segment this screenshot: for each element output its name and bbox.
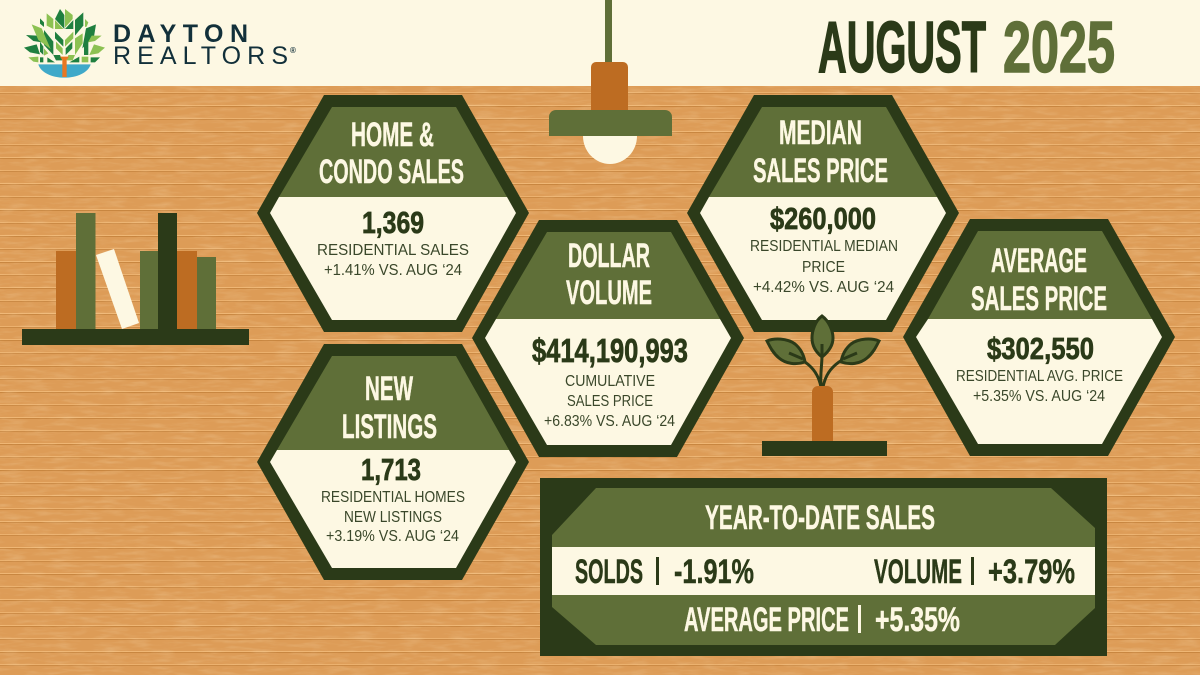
- heading: YEAR-TO-DATE SALES: [705, 499, 935, 537]
- stat: average price: AVERAGE PRICE: [684, 601, 849, 639]
- icon: tree: [24, 9, 105, 78]
- value: $302,550: [987, 331, 1094, 366]
- stat: volume: +3.79%: [988, 553, 1075, 591]
- panel: median sales price: [687, 95, 959, 332]
- wordmark: REALTORS: [113, 42, 288, 70]
- heading: [566, 237, 652, 312]
- description: RESIDENTIAL MEDIAN: [750, 238, 898, 255]
- description: [544, 373, 675, 430]
- heading: SALES PRICE: [753, 152, 888, 190]
- description: NEW LISTINGS: [344, 509, 442, 526]
- heading: LISTINGS: [342, 408, 437, 446]
- heading: CONDO SALES: [319, 153, 464, 191]
- icon: bookshelf: [22, 213, 249, 345]
- wordmark: ®: [290, 46, 296, 55]
- panel: new listings: [257, 344, 529, 580]
- wordmark: [113, 20, 296, 70]
- description: [317, 242, 469, 279]
- heading: NEW: [365, 370, 413, 408]
- description: RESIDENTIAL AVG. PRICE: [956, 368, 1123, 385]
- value: $260,000: [770, 201, 876, 236]
- description: [956, 368, 1123, 405]
- stat: volume: VOLUME: [874, 553, 962, 591]
- icon: hanging lamp: [549, 0, 672, 164]
- header band: [0, 0, 1200, 86]
- wordmark: DAYTON: [113, 20, 248, 48]
- logo: Dayton Realtors: [24, 9, 296, 78]
- stat: solds: -1.91%: [674, 553, 754, 591]
- title: August 2025: 2025: [1003, 8, 1115, 88]
- heading: [342, 370, 437, 446]
- heading: MEDIAN: [779, 114, 862, 152]
- description: +5.35% VS. AUG ‘24: [973, 388, 1105, 405]
- stat: average price: +5.35%: [875, 601, 960, 639]
- heading: [319, 116, 464, 191]
- stat: solds: SOLDS: [575, 553, 643, 591]
- stat: solds: [575, 553, 754, 591]
- description: RESIDENTIAL SALES: [317, 242, 469, 259]
- heading: AVERAGE: [991, 242, 1087, 280]
- heading: SALES PRICE: [971, 280, 1107, 318]
- description: +4.42% VS. AUG ‘24: [753, 279, 894, 296]
- description: SALES PRICE: [567, 393, 653, 410]
- heading: [971, 242, 1107, 318]
- description: +6.83% VS. AUG ‘24: [544, 413, 675, 430]
- icon: potted plant: [762, 316, 887, 456]
- panel: year-to-date sales: [540, 478, 1107, 656]
- value: 1,369: [362, 205, 424, 240]
- description: +1.41% VS. AUG ‘24: [324, 262, 462, 279]
- description: [321, 489, 465, 545]
- heading: DOLLAR: [568, 237, 650, 275]
- value: $414,190,993: [532, 332, 688, 369]
- description: +3.19% VS. AUG ‘24: [326, 528, 459, 545]
- heading: [753, 114, 888, 190]
- description: PRICE: [802, 259, 845, 276]
- value: 1,713: [361, 452, 421, 487]
- title: August 2025: AUGUST: [818, 8, 986, 88]
- panel: dollar volume: [472, 220, 744, 457]
- panel: average sales price: [903, 219, 1175, 456]
- heading: HOME &: [351, 116, 434, 154]
- description: [750, 238, 898, 296]
- description: CUMULATIVE: [565, 373, 655, 390]
- heading: VOLUME: [566, 274, 652, 312]
- description: RESIDENTIAL HOMES: [321, 489, 465, 506]
- panel: home and condo sales: [257, 95, 529, 332]
